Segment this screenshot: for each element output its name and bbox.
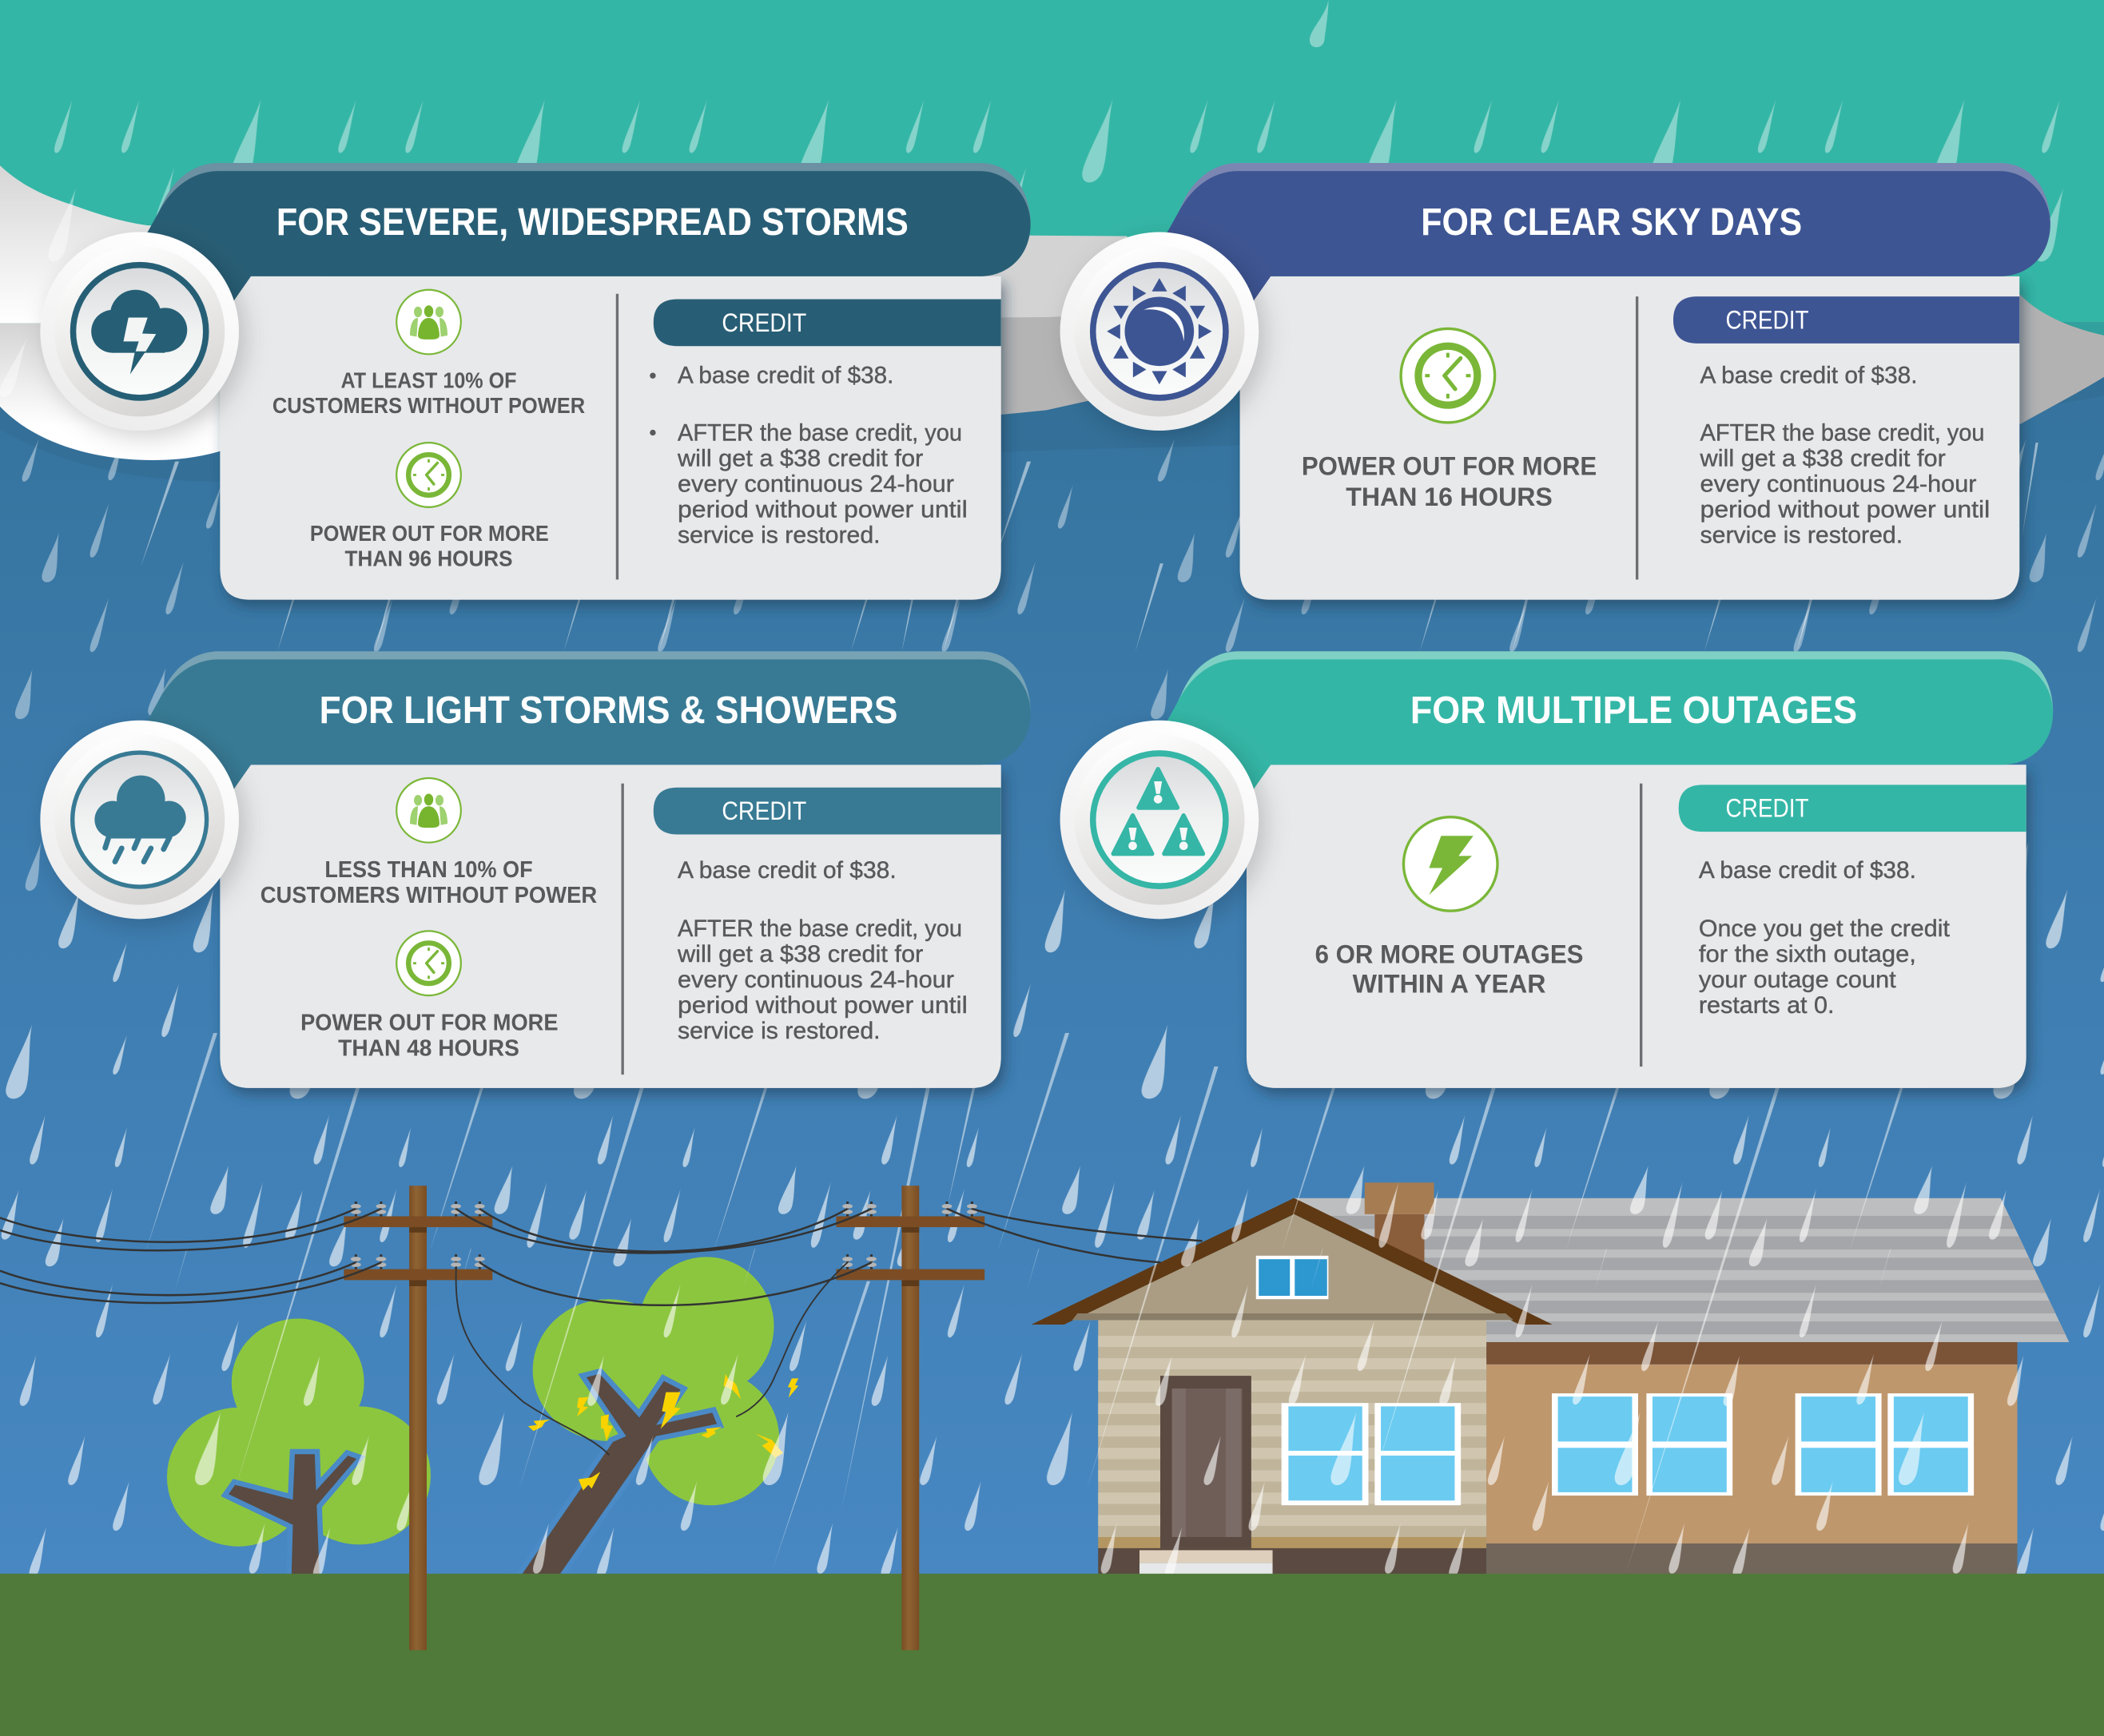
icon: customers (396, 290, 461, 354)
house: gable and roof trim (1032, 1198, 1553, 1325)
fallen tree with sparks (522, 1257, 798, 1574)
credit details (1699, 857, 1950, 1019)
credit label: CREDIT (722, 796, 806, 825)
credit details: restarts at 0. (1699, 992, 1834, 1019)
house: front windows (1282, 1403, 1461, 1505)
credit details: A base credit of $38. (678, 362, 893, 388)
panel heading: FOR MULTIPLE OUTAGES (1410, 689, 1857, 732)
condition text: AT LEAST 10% OF (341, 367, 516, 392)
condition text: LESS THAN 10% OF (324, 857, 533, 883)
grey cloud middle light band (268, 231, 1128, 324)
credit details: AFTER the base credit, you (678, 916, 962, 942)
credit details: A base credit of $38. (1700, 362, 1918, 388)
condition text: CUSTOMERS WITHOUT POWER (261, 883, 597, 908)
credit label (654, 788, 1001, 835)
panel body (220, 276, 1001, 600)
panel body (220, 765, 1001, 1088)
credit label: CREDIT (722, 308, 806, 337)
condition text: CUSTOMERS WITHOUT POWER (272, 393, 585, 418)
panel: clear sky days (1060, 163, 2050, 600)
icon: clock (1401, 328, 1495, 423)
credit details (1700, 362, 1990, 548)
credit details (677, 857, 968, 1044)
credit details: every continuous 24-hour (1700, 471, 1977, 497)
panel body (1247, 765, 2026, 1088)
icon: clock (396, 931, 461, 995)
teal storm cloud (0, 0, 2104, 342)
house (1032, 1182, 2080, 1575)
condition text (261, 857, 597, 908)
panel heading (128, 163, 1031, 316)
icon: thunder cloud badge (40, 232, 239, 431)
outage text: 6 OR MORE OUTAGES (1315, 940, 1583, 969)
credit details: period without power until (1700, 496, 1990, 522)
house: right wing wall (1486, 1342, 2018, 1575)
credit label (1679, 785, 2026, 832)
credit details: AFTER the base credit, you (1700, 420, 1985, 447)
grey cloud middle dark band (805, 312, 1207, 423)
utility pole left (344, 1186, 492, 1651)
house: front door (1160, 1376, 1251, 1548)
icon: customers (396, 778, 461, 843)
duration text: THAN 96 HOURS (345, 546, 512, 571)
credit details: AFTER the base credit, you (678, 420, 962, 447)
grass ground (0, 1574, 2104, 1736)
panel: light storms and showers (40, 651, 1031, 1088)
credit details: service is restored. (678, 522, 881, 548)
credit label: CREDIT (1725, 793, 1809, 823)
house: grey roof (1288, 1198, 2080, 1343)
credit details: will get a $38 credit for (677, 446, 924, 472)
healthy tree (167, 1319, 431, 1574)
credit details: for the sixth outage, (1699, 941, 1916, 967)
icon: rain cloud badge (40, 721, 239, 919)
credit details: every continuous 24-hour (678, 967, 954, 993)
house: gable window (1256, 1256, 1328, 1299)
duration text (1302, 451, 1597, 511)
panel body (1240, 276, 2019, 600)
outage text (1315, 940, 1583, 999)
icon: warning triangles badge (1060, 721, 1259, 919)
panel heading (128, 651, 1031, 805)
credit label (1673, 296, 2019, 344)
house: front wall siding (1098, 1320, 1486, 1575)
white cloud lower lobe (0, 324, 322, 460)
credit details: will get a $38 credit for (1700, 446, 1946, 472)
credit details: service is restored. (1700, 522, 1903, 548)
credit details (650, 362, 968, 548)
outage text: WITHIN A YEAR (1353, 969, 1545, 999)
credit details: A base credit of $38. (678, 857, 897, 884)
duration text (310, 521, 549, 571)
duration text: POWER OUT FOR MORE (310, 521, 549, 546)
credit details: period without power until (678, 496, 968, 522)
white cloud upper lobe (0, 165, 322, 324)
credit details: Once you get the credit (1699, 916, 1950, 942)
credit label: CREDIT (1725, 304, 1809, 334)
icon: clock (396, 443, 461, 507)
credit details: your outage count (1699, 967, 1896, 993)
credit details: service is restored. (678, 1018, 881, 1044)
panel heading: FOR LIGHT STORMS & SHOWERS (320, 689, 897, 732)
icon: lightning bolt (1403, 817, 1497, 911)
panel heading: FOR SEVERE, WIDESPREAD STORMS (276, 201, 909, 244)
credit details: A base credit of $38. (1699, 857, 1916, 884)
credit details: every continuous 24-hour (678, 471, 954, 497)
house: chimney (1365, 1182, 1434, 1270)
cloud shadow (0, 322, 2104, 482)
credit label (654, 299, 1001, 346)
house: right wing windows (1552, 1393, 1974, 1496)
house: front steps (1140, 1550, 1273, 1575)
duration text (300, 1011, 559, 1062)
credit details: period without power until (678, 992, 968, 1019)
condition text (272, 367, 585, 418)
duration text: POWER OUT FOR MORE (300, 1011, 559, 1036)
panel: multiple outages (1060, 651, 2053, 1088)
panel heading: FOR CLEAR SKY DAYS (1421, 201, 1802, 244)
power lines (0, 1209, 1203, 1455)
duration text: THAN 16 HOURS (1346, 482, 1553, 511)
utility pole right (836, 1186, 984, 1651)
grey cloud right lobe (1812, 255, 2104, 463)
duration text: THAN 48 HOURS (338, 1036, 519, 1062)
panel heading (1147, 163, 2050, 316)
panel heading (1147, 651, 2053, 805)
duration text: POWER OUT FOR MORE (1302, 451, 1597, 480)
credit details: will get a $38 credit for (677, 941, 924, 967)
icon: sun badge (1060, 232, 1259, 431)
panel: severe storms (40, 163, 1031, 600)
